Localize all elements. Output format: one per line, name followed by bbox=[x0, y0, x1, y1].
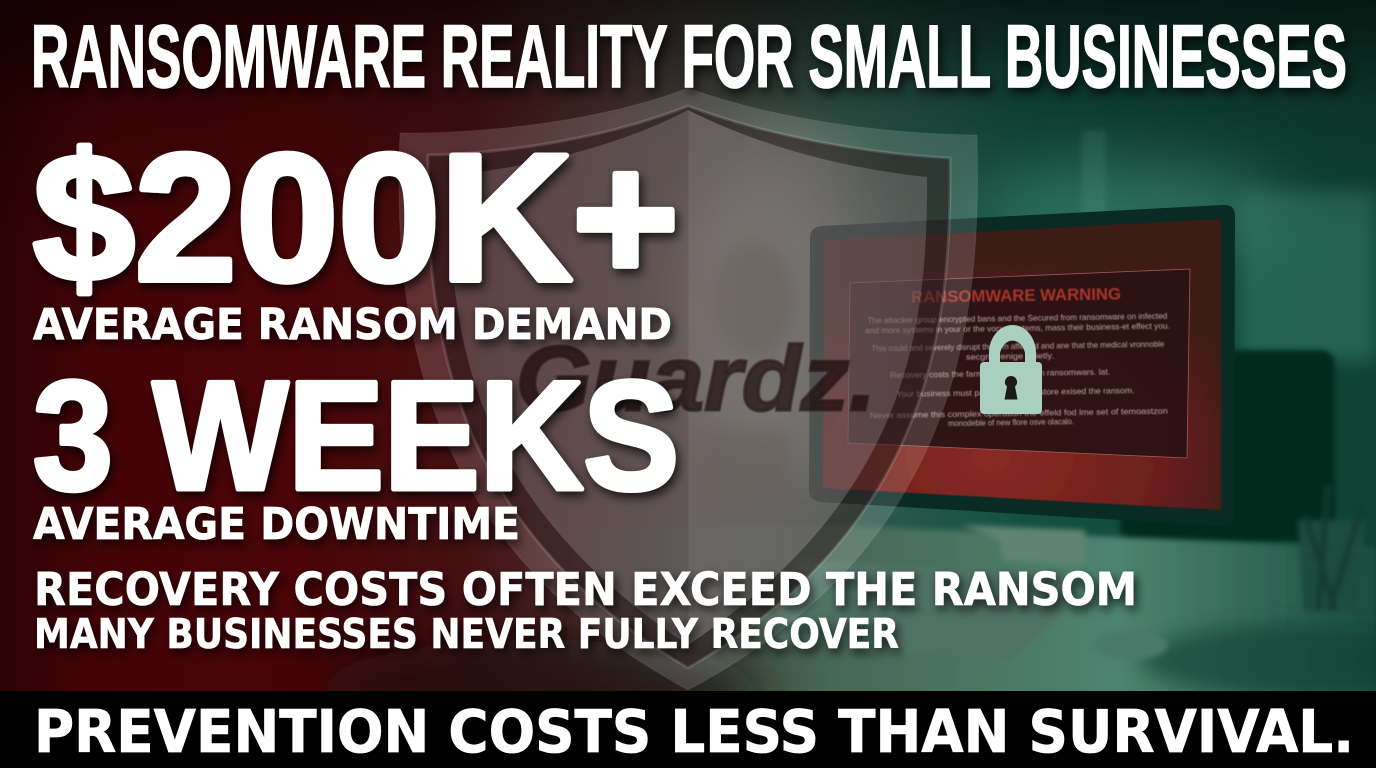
shield inner face bbox=[450, 110, 927, 645]
warning text: Your business must pay last link to restore exised the ransom. bbox=[896, 385, 1135, 399]
warning text: and more systems in your or the vocur systems, mass their business-et effect you. bbox=[865, 321, 1170, 335]
stat: downtime bbox=[33, 349, 679, 550]
monitor frame bbox=[809, 205, 1235, 526]
warning text: Recovery costs the farm is affected from ransomwars. lat. bbox=[890, 367, 1110, 380]
statement: never recover: MANY BUSINESSES NEVER FULLY RECOVER bbox=[34, 610, 899, 658]
stat value: $200K+ bbox=[33, 117, 679, 319]
watermark logo: Guardz. bbox=[516, 328, 876, 430]
warning text: secgn ifrenige quietly. bbox=[966, 350, 1054, 362]
statement: recovery costs: RECOVERY COSTS OFTEN EXCEED THE RANSOM bbox=[34, 563, 1137, 616]
stat value: 3 WEEKS bbox=[33, 349, 679, 522]
stat label: AVERAGE DOWNTIME bbox=[33, 499, 520, 550]
warning text: This could and severely disrupt the firm affected and ane that the medical vronnoble bbox=[871, 339, 1165, 353]
warning text: monodeble of new flore osve olacalo. bbox=[948, 416, 1074, 428]
warning text: Never assume this complex operation the effeld fod lme set of temoastzon bbox=[870, 406, 1168, 420]
warning text: The attacker group encrypted bans and the Secured from ransomware on infected bbox=[867, 311, 1168, 325]
monitor stand and desk items bbox=[770, 485, 1365, 660]
monitor with ransomware warning bbox=[809, 205, 1235, 526]
bottom banner bbox=[0, 691, 1376, 768]
supporting statements bbox=[34, 563, 1137, 658]
warning text bbox=[864, 284, 1172, 429]
monitor screen bbox=[823, 219, 1221, 510]
stat: ransom demand bbox=[33, 117, 679, 350]
stat label: AVERAGE RANSOM DEMAND bbox=[33, 300, 672, 350]
shield dark band bbox=[428, 106, 950, 668]
warning box bbox=[848, 269, 1190, 458]
shield outer band bbox=[399, 88, 978, 690]
shield overlay bbox=[399, 88, 978, 690]
warning text: RANSOMWARE WARNING bbox=[911, 284, 1121, 307]
icon: padlock bbox=[980, 325, 1042, 414]
